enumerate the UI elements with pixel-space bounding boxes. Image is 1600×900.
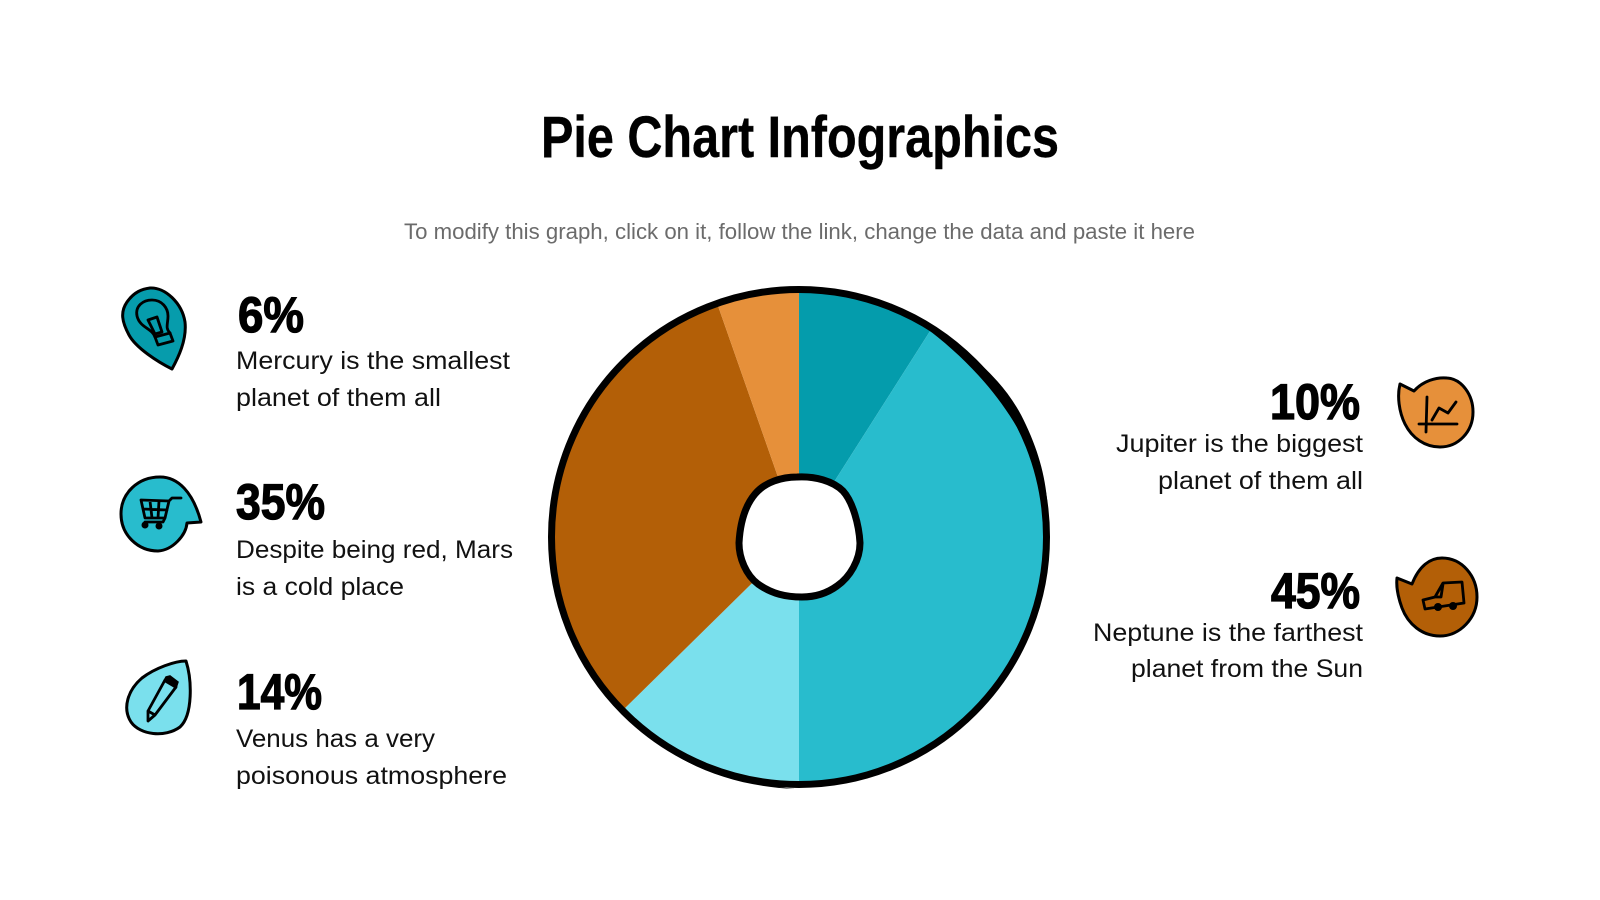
value: 6% (238, 287, 304, 343)
description: is a cold place (236, 573, 404, 601)
description: poisonous atmosphere (236, 762, 507, 790)
centre hole (739, 477, 860, 597)
subtitle: To modify this graph, click on it, follow the link, change the data and paste it here (404, 219, 1195, 244)
panel: Venus (127, 661, 507, 790)
icon: pencil (127, 661, 190, 734)
donut chart (551, 289, 1048, 789)
description (236, 347, 510, 412)
description (1116, 430, 1363, 495)
slice: Venus 14% (622, 537, 799, 785)
description: Jupiter is the biggest (1116, 430, 1363, 458)
icon: car (1397, 558, 1477, 636)
outline thick stroke, lower left (625, 708, 795, 789)
panel: Mercury (123, 287, 510, 412)
slice: Neptune 45% (799, 328, 1046, 785)
panel: Jupiter (1116, 374, 1473, 495)
description (236, 725, 507, 790)
description: Venus has a very (236, 725, 436, 753)
description (1093, 619, 1363, 683)
description: Neptune is the farthest (1093, 619, 1363, 647)
panel: Neptune (1093, 558, 1477, 683)
title: Pie Chart Infographics (541, 105, 1059, 170)
description: planet of them all (236, 384, 441, 412)
description: planet of them all (1158, 467, 1363, 495)
slice: Jupiter 10% (799, 289, 932, 537)
slice: Mars 35% (551, 303, 799, 711)
icon: line chart (1399, 378, 1473, 447)
icon: light bulb (123, 288, 185, 369)
value: 10% (1270, 374, 1360, 430)
icon: shopping cart (121, 477, 201, 551)
description: Despite being red, Mars (236, 536, 513, 564)
outer outline (552, 290, 1046, 784)
outline thick stroke, upper right (930, 325, 1048, 510)
description (236, 536, 513, 601)
value: 45% (1271, 563, 1360, 619)
description: planet from the Sun (1131, 655, 1363, 683)
slice: Mercury 6% (717, 289, 799, 537)
panel: Mars (121, 474, 513, 601)
description: Mercury is the smallest (236, 347, 510, 375)
value: 14% (237, 664, 322, 720)
value: 35% (236, 474, 325, 530)
